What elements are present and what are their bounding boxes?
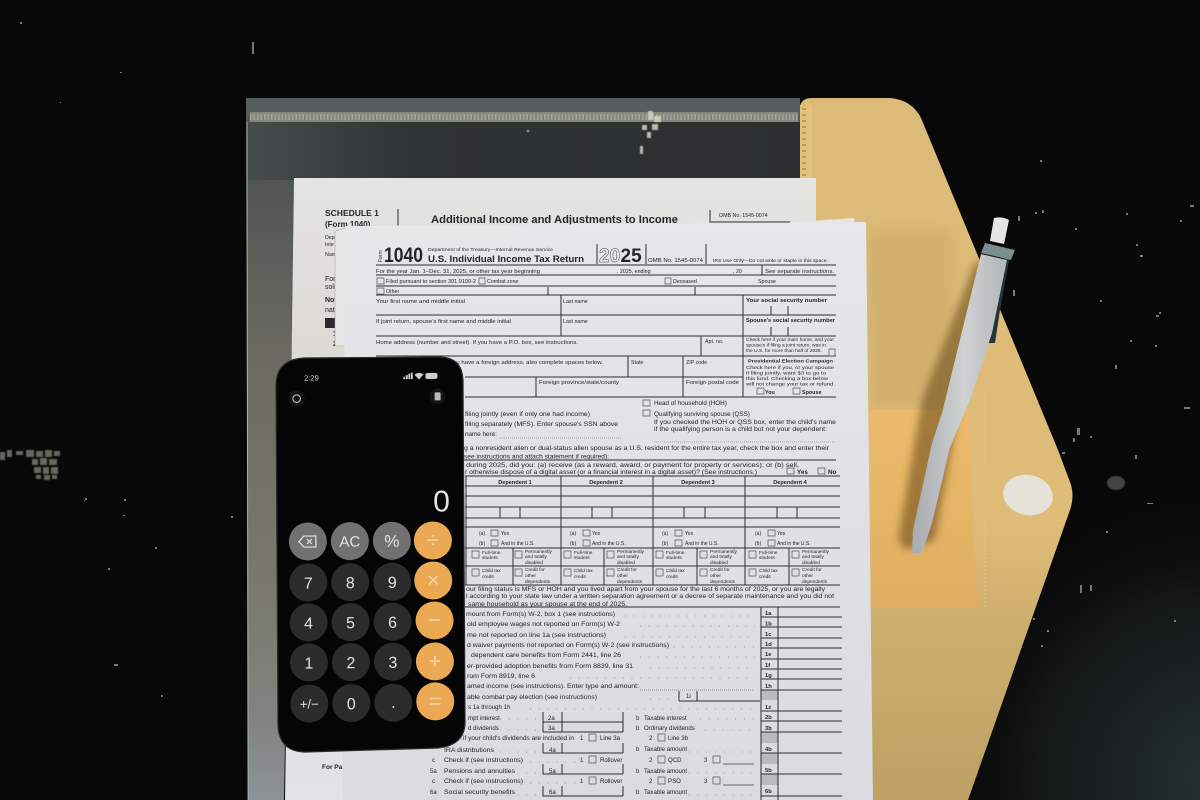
- form identity text: If joint return, spouse's first name and middle initial: [376, 319, 511, 325]
- dependents table: Credit for: [525, 567, 545, 573]
- dependents table: student: [666, 555, 682, 561]
- income row labels: 2a: [548, 715, 555, 722]
- presidential election campaign box: spouse's if filing a joint return, was in: [746, 342, 826, 348]
- tax year: 20: [599, 246, 620, 267]
- income table rules: [543, 607, 842, 800]
- filing note text: our filing status is MFS or HOH and you lived apart from your spouse for the last 6 months of 2025, or you are legally: [466, 586, 826, 593]
- form identity text: Other: [386, 289, 399, 295]
- dependents table: Full-time: [666, 550, 685, 556]
- schedule OMB number: OMB No. 1545-0074: [719, 213, 768, 219]
- form identity text: Combat zone: [487, 279, 519, 285]
- income row labels: Check if (see instructions): [444, 778, 523, 785]
- filing status text: If you checked the HOH or QSS box, enter the child's name: [654, 419, 837, 426]
- form identity text: Foreign province/state/county: [539, 380, 619, 386]
- dependents table: Yes: [592, 531, 601, 537]
- dependents table: (b): [479, 541, 485, 547]
- keypad: 9: [388, 575, 397, 592]
- income row labels: c: [432, 757, 435, 764]
- income row labels: Ordinary dividends: [644, 725, 695, 732]
- income line codes: 1a: [765, 611, 772, 617]
- income row labels: me not reported on line 1a (see instructions): [467, 632, 606, 639]
- income row labels: b: [636, 715, 640, 722]
- dependents table: And in the U.S.: [777, 541, 811, 547]
- dependents table: credit: [482, 574, 494, 580]
- form identity text: Spouse: [758, 279, 776, 285]
- tax year bold: 25: [620, 246, 642, 267]
- keypad: 3: [388, 655, 398, 672]
- dependents table: dependents: [525, 579, 551, 585]
- dependents table: student: [574, 555, 590, 561]
- form identity text: Deceased: [673, 279, 697, 285]
- dependents table: Child tax: [574, 568, 593, 574]
- schedule 1 paper: [285, 178, 820, 800]
- dependents table: other: [802, 573, 813, 579]
- chalky dust patch left: [0, 450, 60, 480]
- dependents table: Yes: [777, 531, 786, 537]
- income line codes: 1h: [765, 684, 772, 690]
- income rows dot leaders: [500, 616, 755, 795]
- dependents table: And in the U.S.: [592, 541, 626, 547]
- calculator display: 0: [433, 485, 450, 518]
- income line codes: 3b: [765, 726, 772, 732]
- schedule left fragments: nat: [325, 307, 335, 314]
- dependents table: Credit for: [802, 567, 822, 573]
- income row labels: b: [636, 789, 640, 796]
- dependents table: And in the U.S.: [501, 541, 535, 547]
- income line codes: 1c: [765, 632, 772, 638]
- schedule left fragments: Nam: [325, 252, 337, 258]
- filing status text: Qualifying surviving spouse (QSS): [654, 411, 750, 418]
- dependents table: Permanently: [802, 549, 830, 555]
- income row labels: 3a: [548, 725, 555, 732]
- dependents table: Dependent 4: [773, 480, 808, 486]
- dependents table: Yes: [685, 531, 694, 537]
- income line codes: 1b: [765, 622, 772, 628]
- filing status text: r otherwise dispose of a digital asset (or a financial interest in a digital asset)? (See instructions.): [465, 469, 757, 476]
- dependents table: disabled: [617, 560, 635, 566]
- dependents table: credit: [574, 574, 586, 580]
- filing status text: filing separately (MFS). Enter spouse's SSN above: [465, 421, 619, 428]
- keypad: +/−: [300, 696, 319, 712]
- dependents table: Full-time: [759, 550, 778, 556]
- keypad: 0: [347, 696, 356, 713]
- schedule left fragments: Dep: [325, 235, 335, 241]
- form header: [378, 244, 828, 267]
- schedule left fragments: soli: [325, 284, 336, 291]
- schedule title: SCHEDULE 1: [325, 208, 379, 218]
- schedule left fragments: Note: [325, 297, 341, 304]
- filing status text: during 2025, did you: (a) receive (as a reward, award, or payment for property or services); or (b) sell,: [466, 462, 799, 469]
- income row labels: 1i: [686, 693, 691, 700]
- dependents table: and totally: [525, 554, 547, 560]
- form identity text: Filed pursuant to section 301.9100-2: [386, 279, 476, 285]
- schedule footer: For Pa: [322, 764, 343, 771]
- keypad: 8: [346, 575, 355, 592]
- dependents table: dependents: [710, 579, 736, 585]
- income row labels: dependent care benefits from Form 2441, line 26: [471, 652, 622, 659]
- form identity text: , 20: [733, 269, 742, 275]
- dependents table: student: [482, 555, 498, 561]
- dependents table: Credit for: [710, 567, 730, 573]
- form identity text: you have a foreign address, also complete spaces below.: [450, 360, 603, 366]
- form identity text: State: [631, 360, 643, 366]
- income row labels: Pensions and annuities: [444, 768, 515, 775]
- IRS use only: IRS Use Only—Do not write or staple in this space.: [713, 258, 828, 263]
- schedule left fragments: [325, 235, 341, 348]
- form identity text: See separate instructions.: [765, 269, 834, 275]
- income row labels: 2: [649, 735, 653, 742]
- dependents table: Child tax: [759, 568, 778, 574]
- income row labels: 4a: [549, 747, 556, 754]
- dependents table: Dependent 2: [589, 480, 623, 486]
- status icons: [403, 372, 437, 380]
- sleeve lit edge: [247, 100, 248, 800]
- plastic sleeve: [246, 98, 800, 800]
- presidential election campaign box: will not change your tax or refund.: [746, 382, 835, 386]
- dependents table: dependents: [802, 579, 828, 585]
- income row labels: 6a: [549, 789, 556, 796]
- income line codes: 1e: [765, 652, 772, 658]
- form identity text: Home address (number and street). If you have a P.O. box, see instructions.: [376, 340, 578, 346]
- income row labels: b: [636, 725, 640, 732]
- dependents table: (b): [662, 541, 668, 547]
- income row labels: b: [636, 746, 640, 753]
- dependents table: Permanently: [525, 549, 553, 555]
- keypad: %: [384, 532, 400, 551]
- income row labels: 1: [580, 757, 584, 764]
- keypad: ×: [427, 567, 440, 593]
- dependents table: disabled: [710, 560, 728, 566]
- filing status text: name here:: [465, 431, 497, 438]
- dependents table: And in the U.S.: [685, 541, 719, 547]
- presidential election campaign box: Presidential Election Campaign: [748, 358, 833, 364]
- yellow folder: [800, 98, 1072, 800]
- income row labels: 3: [704, 757, 708, 764]
- keypad: 1: [304, 655, 314, 673]
- form identity text: , 2025, ending: [617, 269, 651, 275]
- dependents table: dependents: [617, 579, 643, 585]
- filing status text: No: [828, 469, 837, 476]
- keypad: =: [429, 688, 442, 713]
- dependents table: and totally: [617, 554, 639, 560]
- keypad: 5: [346, 615, 355, 632]
- dependents table: and totally: [710, 554, 732, 560]
- dependents table: Permanently: [617, 549, 645, 555]
- income line codes: 5b: [765, 768, 772, 774]
- dependents table: Dependent 3: [681, 480, 715, 486]
- filing status text: [464, 400, 837, 476]
- sleeve zip band: [246, 98, 800, 122]
- schedule left fragments: Inte: [325, 242, 334, 248]
- income line codes: 4b: [765, 747, 772, 753]
- pen body: [912, 254, 1007, 553]
- keypad: 2: [346, 655, 356, 672]
- dependents table: Permanently: [710, 549, 738, 555]
- pen band: [981, 243, 1015, 260]
- dependents table: Full-time: [482, 550, 501, 556]
- income line codes: 1z: [765, 705, 771, 711]
- keypad: 7: [304, 576, 313, 593]
- form identity text: Apt. no.: [705, 339, 723, 345]
- folder seam dots: [984, 390, 986, 610]
- keypad: AC: [339, 534, 361, 551]
- income row labels: old employee wages not reported on Form(s) W-2: [467, 621, 621, 628]
- schedule left fragments: 1: [333, 331, 337, 338]
- schedule heading: Additional Income and Adjustments to Income: [431, 214, 678, 226]
- keypad: −: [428, 607, 441, 632]
- income row labels: rom Form 8919, line 6: [467, 673, 536, 680]
- dependents table: student: [759, 555, 775, 561]
- presidential election campaign box: the U.S. for more than half of 2025.: [746, 348, 822, 353]
- folder sticky panel: [870, 410, 977, 608]
- income row labels: mpt interest: [468, 715, 500, 722]
- velcro closure: [999, 470, 1057, 520]
- keypad: [289, 521, 454, 723]
- income row labels: 5a: [549, 768, 556, 775]
- form identity text: Foreign postal code: [686, 380, 739, 386]
- pen shadow on folder: [898, 262, 985, 550]
- dust patch right: [1107, 476, 1125, 490]
- dependents table: Child tax: [482, 568, 501, 574]
- under sheet right edge: [795, 218, 855, 226]
- keypad: 6: [388, 615, 397, 632]
- form identity text: Your first name and middle initial: [376, 299, 465, 305]
- phone clock: 2:29: [304, 373, 319, 383]
- white pen: [912, 217, 1015, 553]
- OMB number: OMB No. 1545-0074: [648, 258, 703, 264]
- filing status text: g a nonresident alien or dual-status alien spouse as a U.S. resident for the entire tax year, check the box and enter their: [464, 445, 829, 452]
- income row labels: 6a: [430, 789, 437, 796]
- filing status text: see instructions and attach statement if required):: [464, 454, 609, 460]
- form identity text: For the year Jan. 1–Dec. 31, 2025, or other tax year beginning: [376, 269, 540, 275]
- filing status text: if the qualifying person is a child but not your dependent:: [654, 426, 827, 433]
- income line codes: [765, 611, 772, 795]
- dependents table: other: [525, 573, 536, 579]
- schedule part box: [325, 318, 345, 328]
- schedule left fragments: 2: [333, 341, 337, 348]
- dependents table: and totally: [802, 554, 824, 560]
- sleeve top window: [246, 120, 800, 180]
- income row labels: er-provided adoption benefits from Form 8839, line 31: [467, 663, 634, 670]
- pen button: [990, 217, 1009, 244]
- filing note text: same household as your spouse at the end of 2025.: [468, 601, 627, 608]
- dependents table: disabled: [525, 560, 543, 566]
- income row labels: s 1a through 1h: [468, 704, 510, 711]
- dependents table: (b): [570, 541, 576, 547]
- form title: U.S. Individual Income Tax Return: [428, 254, 584, 265]
- income row labels: Taxable interest: [644, 715, 687, 722]
- department line: Department of the Treasury—Internal Revenue Service: [428, 247, 554, 252]
- form identity text: ZIP code: [686, 360, 707, 366]
- income row labels: Check if (see instructions): [444, 757, 523, 764]
- keypad: 4: [304, 615, 313, 633]
- presidential election campaign box: Spouse: [802, 390, 821, 396]
- income row labels: Taxable amount: [644, 789, 687, 796]
- income row labels: Rollover: [600, 757, 622, 764]
- keypad: .: [391, 695, 396, 712]
- schedule form number: (Form 1040): [325, 220, 371, 229]
- income row labels: [430, 611, 708, 796]
- filing note text: l according to your state law under a written separation agreement or a decree of separate maintenance and you did not: [466, 593, 834, 600]
- under sheet left strip: [335, 228, 346, 346]
- presidential election campaign box: if filing jointly, want $3 to go to: [746, 370, 827, 376]
- dependents table: credit: [759, 574, 771, 580]
- income row labels: Social security benefits: [444, 789, 515, 796]
- filing status text: Yes: [797, 469, 808, 476]
- income row labels: Line 3b: [668, 735, 689, 742]
- form identity text: [376, 269, 835, 386]
- dependents table: other: [710, 573, 721, 579]
- income row labels: Taxable amount: [644, 746, 687, 753]
- form identity text: Your social security number: [746, 298, 827, 304]
- dependents table: (a): [662, 531, 668, 537]
- income row labels: Taxable amount: [644, 768, 687, 775]
- income row labels: amed income (see instructions). Enter type and amount:: [467, 683, 639, 690]
- pen clip: [985, 255, 1010, 343]
- presidential election campaign box: [746, 337, 835, 396]
- income row labels: 1: [580, 778, 584, 785]
- presidential election campaign box: Check here if you, or your spouse: [746, 365, 834, 370]
- form identity text: Last name: [563, 319, 588, 325]
- dependents table: (a): [755, 531, 761, 537]
- income row labels: d waiver payments not reported on Form(s) W-2 (see instructions): [467, 642, 669, 649]
- form rule lines: [376, 244, 836, 460]
- income shaded cells: [761, 690, 778, 785]
- form identity text: Last name: [563, 299, 588, 305]
- income row labels: 3: [704, 778, 708, 785]
- income row labels: mount from Form(s) W-2, box 1 (see instructions): [466, 611, 615, 618]
- income row labels: 2: [649, 757, 653, 764]
- income line codes: 1g: [765, 673, 772, 679]
- income line codes: 1f: [765, 663, 770, 669]
- keypad: ÷: [427, 527, 439, 553]
- dependents table: other: [617, 573, 628, 579]
- income row labels: 2: [649, 778, 653, 785]
- schedule left fragments: For: [325, 276, 336, 283]
- filing status text: filing jointly (even if only one had income): [465, 411, 590, 418]
- income row labels: 1: [580, 735, 584, 742]
- income row labels: b: [636, 768, 640, 775]
- dependents table: Credit for: [617, 567, 637, 573]
- dependents table: disabled: [802, 560, 820, 566]
- income row labels: able combat pay election (see instructions): [467, 694, 597, 701]
- form header: Form: [378, 250, 384, 262]
- dependents table: Child tax: [666, 568, 685, 574]
- form number: 1040: [384, 244, 423, 267]
- header checkboxes: [377, 278, 835, 474]
- income line codes: 1d: [765, 642, 772, 648]
- form 1040 sheet: [343, 222, 873, 800]
- phone calculator: [276, 357, 465, 752]
- income line codes: 2b: [765, 715, 772, 721]
- dependents table: (a): [570, 531, 576, 537]
- dependents table: credit: [666, 574, 678, 580]
- dependents table: Dependent 1: [498, 480, 532, 486]
- presidential election campaign box: this fund. Checking a box below: [746, 376, 829, 381]
- dependents table: Full-time: [574, 550, 593, 556]
- income row labels: PSO: [668, 778, 681, 785]
- income row labels: d dividends: [468, 725, 499, 732]
- form identity text: Spouse's social security number: [746, 318, 835, 324]
- income row labels: 5a: [430, 768, 437, 775]
- income row labels: QCD: [668, 757, 682, 764]
- folder seam strip: [799, 105, 812, 179]
- income row labels: if your child's dividends are included in: [463, 735, 574, 742]
- presidential election campaign box: You: [765, 390, 775, 396]
- dependents table: Yes: [501, 531, 510, 537]
- income line codes: 6b: [765, 789, 772, 795]
- dust on sleeve: [527, 111, 661, 154]
- income row labels: c: [432, 778, 435, 785]
- income row labels: IRA distributions: [444, 747, 494, 754]
- folder upper shading: [866, 230, 960, 410]
- keypad: +: [428, 648, 441, 673]
- filing note text: [466, 586, 834, 608]
- dependents table: (a): [479, 531, 485, 537]
- dependents table: [465, 476, 840, 607]
- income row labels: Rollover: [600, 778, 622, 785]
- calculator icon: [430, 388, 446, 404]
- history icon: [289, 391, 305, 407]
- filing status text: Head of household (HOH): [654, 400, 727, 407]
- presidential election campaign box: Check here if your main home, and your: [746, 337, 834, 342]
- dependents table: (b): [755, 541, 761, 547]
- income row labels: Line 3a: [600, 735, 621, 742]
